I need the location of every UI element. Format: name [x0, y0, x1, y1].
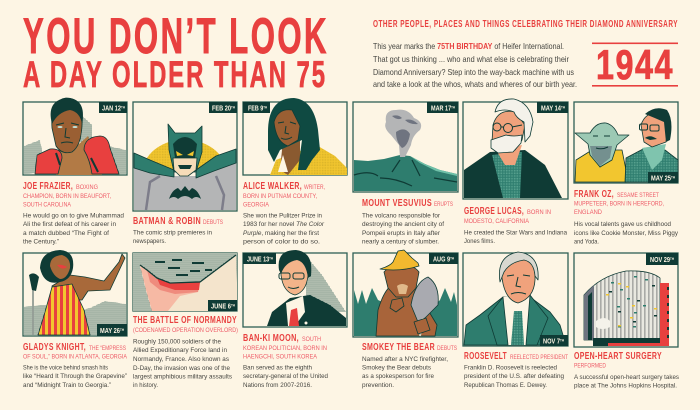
caption — [23, 180, 124, 246]
caption: Allied Expeditionary Force land in — [133, 347, 227, 354]
caption: BOXING — [76, 184, 98, 191]
panel: Open-heart surgery — [574, 253, 680, 390]
date tag: TH — [231, 104, 235, 110]
panel: Smokey the Bear — [353, 250, 458, 389]
caption: president of the U.S. after defeating — [464, 373, 564, 380]
illustration: Johns Hopkins Hospital building — [584, 271, 669, 346]
caption: ERUPTS — [434, 201, 453, 208]
date tag — [97, 324, 127, 336]
caption: SOUTH — [302, 336, 321, 343]
date tag — [427, 102, 458, 113]
date tag — [540, 335, 568, 346]
date tag: TH — [671, 174, 675, 180]
caption: in history. — [133, 382, 158, 389]
panel: Alice Walker — [243, 98, 347, 246]
date tag: MAY 25 — [651, 174, 678, 182]
caption: SESAME STREET — [617, 192, 659, 199]
caption: THE BATTLE OF NORMANDY — [133, 314, 237, 326]
caption: ALICE WALKER, — [243, 180, 302, 192]
illustration: Alice Walker — [268, 98, 347, 175]
caption: SOUTH CAROLINA — [23, 202, 72, 208]
date tag: FEB 9 — [248, 104, 270, 112]
caption: PERFORMED — [574, 362, 606, 370]
caption: SMOKEY THE BEAR — [362, 341, 435, 353]
caption: Ali the first defeat of his career in — [23, 221, 116, 228]
caption: Franklin D. Roosevelt is reelected — [464, 364, 557, 372]
caption: and “Midnight Train to Georgia.” — [23, 382, 111, 389]
caption: BORN IN PUTNAM COUNTY, — [243, 193, 317, 200]
illustration: erupting volcano — [354, 110, 457, 191]
caption — [464, 350, 568, 389]
caption — [362, 341, 457, 389]
caption — [243, 332, 328, 389]
caption: place at The Johns Hopkins Hospital. — [574, 382, 677, 390]
caption: BATMAN & ROBIN — [133, 215, 201, 227]
panel: Battle of Normandy — [133, 253, 238, 389]
illustration: Batman — [134, 124, 236, 210]
panel: Mount Vesuvius — [353, 102, 458, 246]
date tag: MAY 14 — [541, 104, 568, 112]
date tag: NOV 7 — [543, 336, 566, 346]
date tag: TH — [263, 104, 267, 110]
caption: Republican Thomas E. Dewey. — [464, 382, 547, 389]
caption: ROOSEVELT — [464, 350, 507, 362]
caption: secretary-general of the United — [243, 373, 328, 380]
caption: D-Day, the invasion was one of the — [133, 365, 230, 372]
date tag: TH — [451, 104, 455, 110]
caption: as a spokesperson for fire — [362, 373, 434, 380]
date tag: MAR 17 — [431, 104, 459, 112]
intro paragraph: and take a look at the whos, whats and wheres of our birth year. — [373, 79, 577, 89]
caption — [23, 341, 128, 389]
caption: Jones films. — [464, 238, 495, 245]
caption: Normandy, France. Also known as — [133, 356, 230, 363]
date tag — [243, 102, 270, 113]
caption: person of color to do so. — [243, 238, 320, 246]
caption: BAN-KI MOON, — [243, 332, 299, 344]
panel: Joe Frazier — [23, 98, 127, 246]
caption: GEORGIA — [243, 202, 270, 208]
title: A DAY OLDER THAN 75 — [23, 54, 327, 95]
caption: Smokey the Bear debuts — [362, 364, 432, 372]
illustration: Joe Frazier boxing — [24, 98, 126, 175]
caption: A successful open-heart surgery takes — [574, 374, 680, 381]
date tag: TH — [670, 256, 674, 261]
date tag: TH — [560, 338, 564, 342]
illustration: Roosevelt — [464, 252, 566, 345]
intro paragraph: This year marks the 75TH BIRTHDAY of Heifer International. — [373, 41, 564, 51]
panel: Gladys Knight — [23, 250, 128, 389]
caption: MOUNT VESUVIUS — [362, 197, 432, 209]
date tag: TH — [231, 302, 235, 308]
caption: JOE FRAZIER, — [23, 180, 73, 192]
caption: DEBUTS — [437, 345, 457, 352]
caption: 1983 for her novel The Color — [243, 221, 325, 228]
caption: THE “EMPRESS — [89, 345, 126, 352]
date tag — [646, 253, 678, 265]
date tag: TH — [561, 104, 565, 110]
date tag — [243, 253, 276, 264]
illustration: Smokey the Bear — [354, 250, 457, 336]
caption — [133, 314, 238, 389]
caption: Nations from 2007-2016. — [243, 382, 312, 389]
caption: WRITER, — [304, 184, 325, 191]
caption: nearly a century of slumber. — [362, 238, 439, 246]
caption: destroying the ancient city of — [362, 221, 444, 228]
caption: Ban served as the eighth — [243, 364, 312, 372]
caption: a match dubbed “The Fight of — [23, 230, 109, 237]
caption: icons like Cookie Monster, Miss Piggy — [574, 230, 679, 237]
caption: like “Heard It Through the Grapevine” — [23, 373, 127, 380]
caption: GEORGE LUCAS, — [464, 205, 524, 217]
illustration: Yoda and Frank Oz — [575, 108, 678, 182]
intro paragraph: Diamond Anniversary? Step into the way-back machine with us — [373, 67, 574, 77]
title — [23, 8, 329, 95]
caption: She is the voice behind smash hits — [23, 364, 109, 372]
date tag: TH — [450, 256, 454, 260]
caption — [133, 215, 223, 245]
date tag: FEB 20 — [212, 104, 238, 112]
date tag: JUNE 13 — [247, 254, 278, 264]
caption — [362, 197, 453, 246]
caption: She won the Pulitzer Prize in — [243, 212, 322, 220]
date tag: AUG 9 — [433, 254, 456, 264]
caption: largest amphibious military assaults — [133, 374, 233, 380]
caption: Purple, making her the first — [243, 230, 319, 237]
date tag: JUNE 6 — [211, 302, 238, 310]
illustration: George Lucas — [464, 99, 562, 198]
caption: MODESTO, CALIFORNIA — [464, 218, 530, 225]
caption: (CODENAMED OPERATION OVERLORD) — [133, 327, 238, 334]
caption: the Century.” — [23, 238, 59, 246]
caption: The volcano responsible for — [362, 212, 441, 220]
caption: Pompeii erupts in Italy after — [362, 230, 441, 237]
caption: ENGLAND — [574, 209, 602, 216]
panel: Batman and Robin — [133, 102, 237, 245]
caption: BORN IN — [527, 209, 551, 216]
caption: and Yoda. — [574, 238, 599, 246]
panel: Ban Ki-moon — [243, 250, 347, 389]
caption: GLADYS KNIGHT, — [23, 341, 86, 353]
caption: His vocal talents gave us childhood — [574, 221, 671, 228]
caption — [464, 205, 567, 245]
caption: OF SOUL,” BORN IN ATLANTA, GEORGIA — [23, 354, 128, 360]
caption — [574, 350, 680, 390]
panel: Frank Oz — [574, 102, 679, 246]
date tag: NOV 29 — [650, 255, 677, 264]
illustration: Normandy map — [133, 253, 238, 311]
caption: The comic strip premieres in — [133, 230, 212, 236]
caption: newspapers. — [133, 238, 166, 245]
date tag: MAY 26 — [100, 326, 127, 335]
panel: George Lucas — [463, 99, 568, 245]
illustration: Ban Ki-moon — [267, 250, 346, 326]
illustration: Gladys Knight singing — [24, 250, 126, 335]
date tag — [429, 253, 458, 264]
date tag: JAN 12 — [102, 104, 128, 112]
caption: prevention. — [362, 382, 394, 389]
caption: Roughly 150,000 soldiers of the — [133, 338, 221, 346]
caption: FRANK OZ, — [574, 188, 614, 200]
date tag: TH — [120, 327, 124, 332]
caption — [574, 188, 679, 246]
date tag: TH — [269, 256, 273, 260]
panel: Roosevelt — [463, 252, 568, 389]
caption: KOREAN POLITICIAN, BORN IN — [243, 345, 327, 352]
caption — [243, 180, 325, 246]
caption: He created the Star Wars and Indiana — [464, 230, 567, 236]
title: YOU DON’T LOOK — [23, 8, 329, 64]
caption: DEBUTS — [203, 219, 223, 226]
caption: Named after a NYC firefighter, — [362, 356, 448, 363]
caption: REELECTED PRESIDENT — [510, 354, 568, 361]
caption: CHAMPION, BORN IN BEAUFORT, — [23, 193, 111, 200]
caption: MUPPETEER, BORN IN HEREFORD, — [574, 200, 664, 208]
year badge 1944: 1944 — [596, 41, 674, 88]
intro paragraph: That got us thinking ... who and what else is celebrating their — [373, 54, 569, 64]
intro paragraph — [373, 41, 577, 89]
caption: He would go on to give Muhammad — [23, 212, 124, 220]
date tag: TH — [121, 104, 125, 110]
caption: HAENGCHI, SOUTH KOREA — [243, 354, 318, 360]
